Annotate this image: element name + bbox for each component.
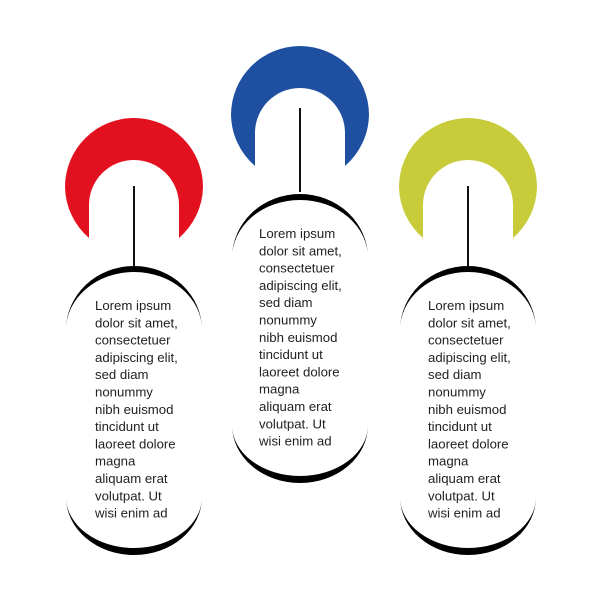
text block: dolor sit amet,	[95, 315, 178, 330]
text block: tincidunt ut	[95, 419, 159, 434]
text block: sed diam	[95, 367, 149, 382]
text block	[258, 226, 342, 449]
top arc	[400, 266, 536, 330]
connector line	[133, 186, 135, 268]
text block: adipiscing elit,	[95, 350, 178, 365]
icon: yellow crescent	[399, 118, 537, 238]
icon: red crescent	[65, 118, 203, 238]
text block: dolor sit amet,	[259, 243, 342, 258]
text block: aliquam erat	[428, 471, 501, 486]
text block: volutpat. Ut	[259, 416, 326, 431]
text block: Lorem ipsum	[95, 298, 171, 313]
top arc	[66, 266, 202, 330]
text block: magna	[428, 454, 469, 469]
text block: dolor sit amet,	[428, 315, 511, 330]
text block: nibh euismod	[428, 402, 506, 417]
connector line	[467, 186, 469, 268]
text block: wisi enim ad	[258, 434, 332, 449]
text block: nonummy	[95, 384, 153, 400]
text block: aliquam erat	[95, 471, 168, 486]
text block: Lorem ipsum	[259, 226, 335, 241]
panel: blue item	[231, 46, 369, 483]
text block: consectetuer	[428, 333, 504, 348]
icon: blue crescent	[231, 46, 369, 166]
text block: nibh euismod	[259, 330, 337, 345]
text block: consectetuer	[259, 261, 335, 276]
bottom arc	[400, 497, 536, 555]
text block: tincidunt ut	[428, 419, 492, 434]
text block: adipiscing elit,	[259, 278, 342, 293]
text block: volutpat. Ut	[428, 488, 495, 503]
text block: magna	[95, 454, 136, 469]
text block: laoreet dolore	[259, 364, 340, 379]
text block: volutpat. Ut	[95, 488, 162, 503]
text block: wisi enim ad	[94, 506, 168, 521]
text block: wisi enim ad	[427, 506, 501, 521]
text block: nonummy	[428, 384, 486, 400]
text block: nonummy	[259, 312, 317, 328]
text block: nibh euismod	[95, 402, 173, 417]
text block	[427, 298, 511, 521]
text block: Lorem ipsum	[428, 298, 504, 313]
text block: aliquam erat	[259, 399, 332, 414]
text block: consectetuer	[95, 333, 171, 348]
text block: laoreet dolore	[95, 436, 176, 451]
text block: tincidunt ut	[259, 347, 323, 362]
text block: sed diam	[428, 367, 482, 382]
text block: laoreet dolore	[428, 436, 509, 451]
text block: adipiscing elit,	[428, 350, 511, 365]
panel: yellow item	[399, 118, 537, 555]
text block: sed diam	[259, 295, 313, 310]
top arc	[232, 194, 368, 258]
text block: magna	[259, 382, 300, 397]
text block	[94, 298, 178, 521]
connector line	[299, 108, 301, 192]
panel: red item	[65, 118, 203, 555]
bottom arc	[66, 497, 202, 555]
bottom arc	[232, 425, 368, 483]
